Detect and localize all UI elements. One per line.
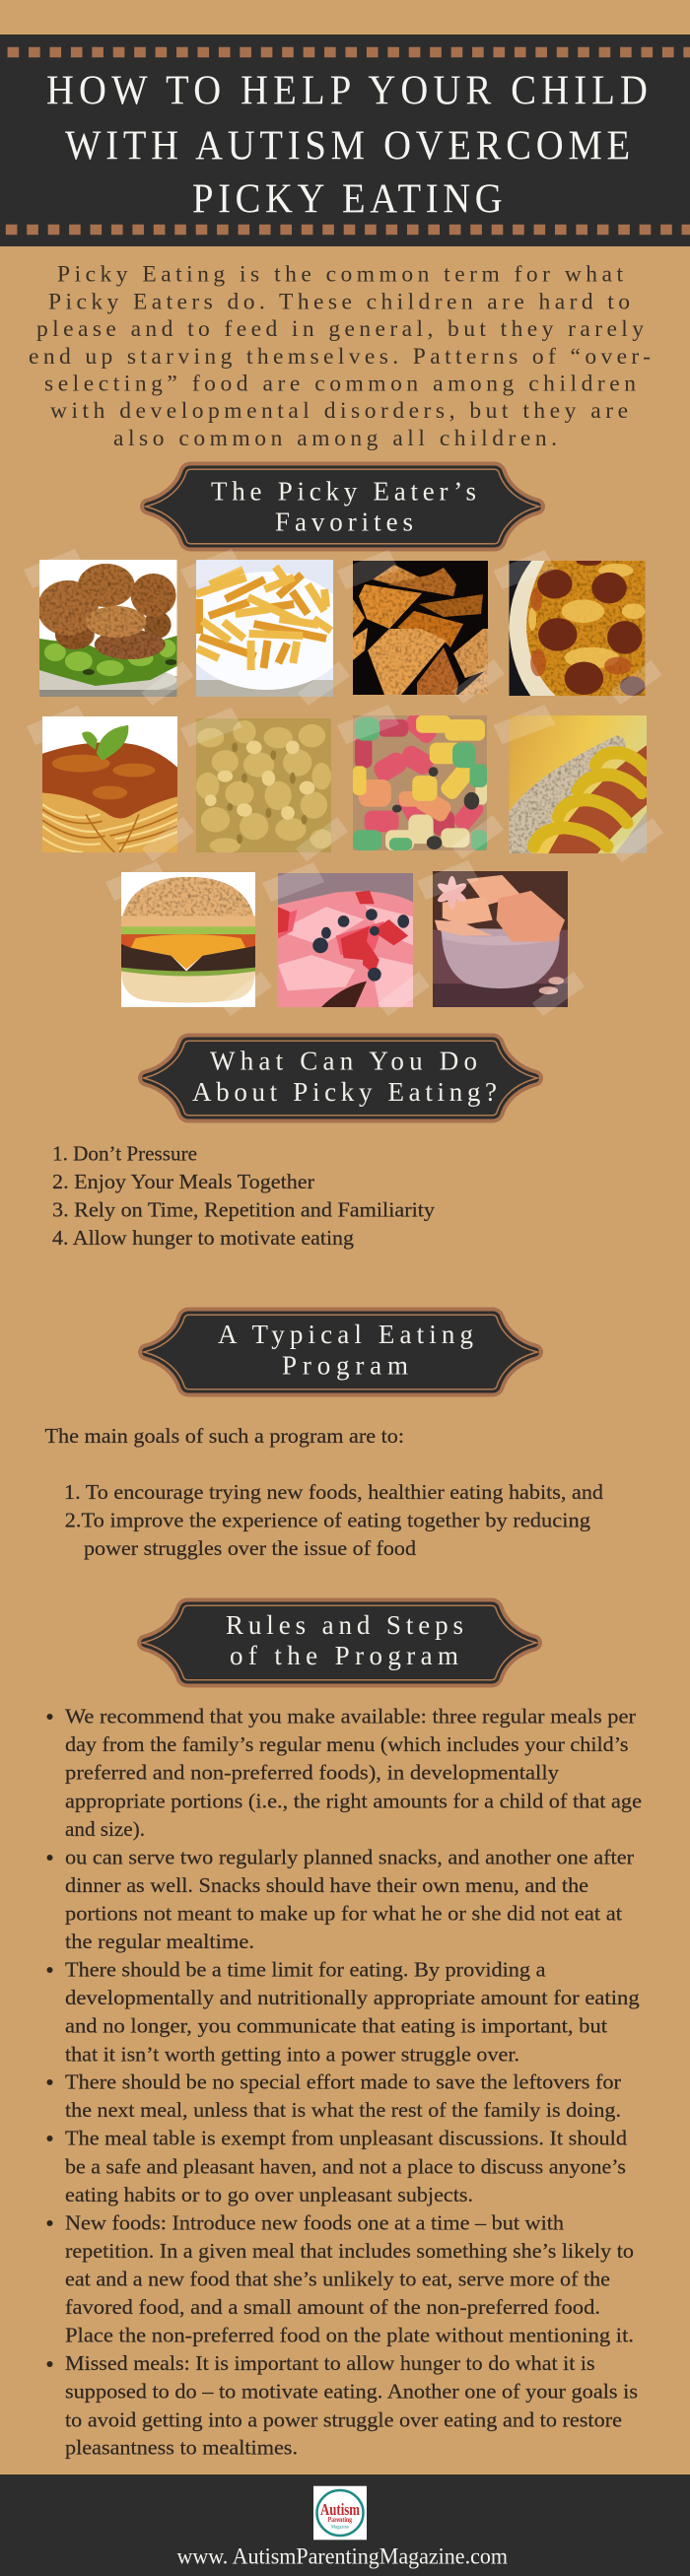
rule: missed meals: pleasantness to mealtimes. — [65, 2436, 298, 2460]
photo: cheeseburger — [121, 872, 255, 1007]
banner: A Typical Eating Program: A Typical Eating — [218, 1320, 473, 1349]
rule: meals: and size). — [65, 1817, 145, 1841]
banner: Rules and Steps of the Program: Rules and Steps — [226, 1610, 463, 1640]
rule: missed meals: to avoid getting into a power struggle over eating and to restore — [65, 2407, 622, 2431]
rule: time limit — [47, 1957, 640, 2066]
website url: www. AutismParentingMagazine.com — [177, 2544, 508, 2569]
rule: meal table: eating habits or to go over unpleasant subjects. — [65, 2183, 473, 2206]
numbered list: what you can do — [52, 1141, 436, 1250]
rule: snacks — [47, 1846, 634, 1953]
banner: The Picky Eater's Favorites — [148, 470, 536, 543]
rule: time limit: that it isn’t worth getting into a power struggle over. — [65, 2042, 519, 2066]
rule: new foods — [47, 2210, 634, 2346]
banner: What Can You Do About Picky Eating?: About Picky Eating? — [192, 1077, 497, 1107]
photo: hot dog with mustard — [509, 715, 647, 853]
logo: Autism Parenting Magazine: Magazine — [331, 2525, 350, 2531]
rule: new foods: Place the non-preferred food on the plate without mentioning it. — [65, 2323, 634, 2346]
rule: leftovers — [47, 2069, 621, 2122]
rule: time limit: developmentally and nutritionally appropriate amount for eating — [65, 1986, 640, 2009]
rule: new foods: favored food, and a small amount of the non-preferred food. — [65, 2295, 600, 2319]
header band — [0, 34, 690, 246]
banner: What Can You Do About Picky Eating?: What Can You Do — [210, 1046, 477, 1075]
bullet list: rules — [47, 1704, 642, 2460]
banner: Rules and Steps of the Program: of the Program — [230, 1641, 458, 1670]
rule: missed meals — [47, 2351, 638, 2460]
banner: The Picky Eater's Favorites: Favorites — [275, 508, 413, 537]
numbered list: program goals — [64, 1480, 604, 1560]
rule: meal table: The meal table is exempt from unpleasant discussions. It should — [65, 2127, 628, 2150]
rule: meal table: be a safe and pleasant haven, and not a place to discuss anyone’s — [65, 2154, 626, 2178]
photo: pepperoni pizza — [509, 561, 645, 696]
rule: meals: preferred and non-preferred foods), in developmentally — [65, 1761, 560, 1785]
intro paragraph: Picky Eaters do. These children are hard to — [48, 290, 630, 315]
rule: snacks: ou can serve two regularly planned snacks, and another one after — [65, 1846, 634, 1869]
photo: chicken nuggets — [39, 560, 177, 697]
rule: snacks: the regular mealtime. — [65, 1930, 254, 1953]
rule: time limit: and no longer, you communicate that eating is important, but — [65, 2014, 607, 2038]
logo: Autism Parenting Magazine: Parenting — [328, 2515, 352, 2524]
photo: berry cheesecake — [278, 873, 413, 1007]
banner: A Typical Eating Program — [146, 1316, 534, 1389]
photo: macaroni and cheese — [196, 718, 331, 852]
intro paragraph: selecting” food are common among children — [44, 371, 636, 396]
rule: leftovers: the next meal, unless that is what the rest of the family is doing. — [65, 2098, 621, 2122]
rule: time limit: There should be a time limit for eating. By providing a — [65, 1957, 546, 1981]
intro paragraph — [29, 262, 651, 451]
photo: gummy candy — [353, 715, 487, 850]
title: WITH AUTISM OVERCOME — [65, 122, 630, 169]
rule: meal table — [47, 2127, 628, 2206]
photo: potato chips — [353, 561, 488, 695]
title: HOW TO HELP YOUR CHILD — [46, 67, 648, 113]
photo: spaghetti with sauce — [42, 716, 177, 852]
rule: new foods: eat and a new food that she’s unlikely to eat, serve more of the — [65, 2267, 610, 2290]
rule: missed meals: Missed meals: It is important to allow hunger to do what it is — [65, 2351, 595, 2375]
intro paragraph: end up starving themselves. Patterns of “over- — [29, 344, 651, 370]
intro paragraph: Picky Eating is the common term for what — [57, 262, 623, 288]
intro paragraph: please and to feed in general, but they rarely — [36, 316, 644, 342]
photo: french fries — [196, 560, 333, 697]
rule: meals: We recommend that you make available: three regular meals per — [65, 1704, 636, 1728]
numbered list: what you can do: 3. Rely on Time, Repetition and Familiarity — [52, 1198, 436, 1222]
rule: missed meals: supposed to do – to motivate eating. Another one of your goals is — [65, 2380, 638, 2404]
numbered list: program goals: 2.To improve the experience of eating together by reducing — [65, 1509, 591, 1532]
numbered list: program goals: power struggles over the issue of food — [84, 1536, 417, 1560]
banner: Rules and Steps of the Program — [146, 1606, 534, 1679]
title — [46, 67, 648, 222]
rule: new foods: repetition. In a given meal that includes something she’s likely to — [65, 2239, 634, 2263]
rule: meals: day from the family’s regular menu (which includes your child’s — [65, 1732, 629, 1756]
rule: meals: appropriate portions (i.e., the right amounts for a child of that age — [65, 1789, 642, 1812]
intro paragraph: with developmental disorders, but they are — [50, 398, 628, 424]
decorative diamonds — [24, 549, 663, 1016]
text: main goals intro: The main goals of such a program are to: — [45, 1424, 404, 1448]
photo: cookies in a bowl — [433, 871, 568, 1007]
banner: What Can You Do About Picky Eating? — [146, 1042, 534, 1115]
rule: leftovers: There should be no special effort made to save the leftovers for — [65, 2069, 621, 2093]
title: PICKY EATING — [192, 175, 503, 222]
rule: new foods: New foods: Introduce new foods one at a time – but with — [65, 2210, 565, 2234]
numbered list: what you can do: 4. Allow hunger to motivate eating — [52, 1226, 355, 1250]
intro paragraph: also common among all children. — [113, 426, 557, 451]
banner: The Picky Eater's Favorites: The Picky Eater’s — [211, 477, 476, 507]
rule: snacks: dinner as well. Snacks should have their own menu, and the — [65, 1873, 588, 1897]
footer band — [0, 2474, 690, 2576]
rule: snacks: portions not meant to make up for what he or she did not eat at — [65, 1902, 622, 1926]
numbered list: what you can do: 1. Don’t Pressure — [52, 1141, 197, 1165]
logo: Autism Parenting Magazine — [313, 2486, 367, 2540]
numbered list: what you can do: 2. Enjoy Your Meals Together — [52, 1170, 314, 1193]
rule: meals — [47, 1704, 642, 1841]
numbered list: program goals: 1. To encourage trying new foods, healthier eating habits, and — [64, 1480, 604, 1504]
banner: A Typical Eating Program: Program — [282, 1351, 408, 1381]
logo: Autism Parenting Magazine: Autism — [320, 2500, 360, 2519]
